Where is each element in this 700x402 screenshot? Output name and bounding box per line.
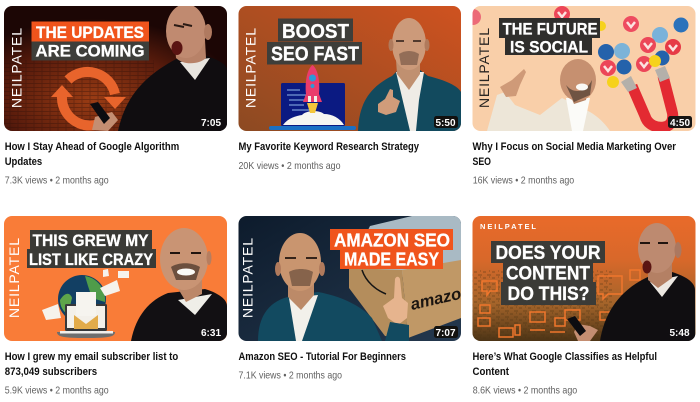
brand: neilpatel: NEILPATEL: [480, 222, 536, 231]
thumbnail: amazon seo made easy: [238, 216, 473, 341]
heading: list like crazy: LIST LIKE CRAZY: [29, 250, 154, 269]
video card 5: [238, 216, 473, 382]
orange label: made easy: [340, 250, 443, 269]
icons: speech bubbles: [478, 270, 640, 337]
brand: neilpatel: NEILPATEL: [240, 238, 256, 318]
person: [258, 233, 409, 341]
thumbnail: the future is social: 4:50: [670, 118, 690, 129]
grey label: does your: [491, 241, 605, 263]
grey label: boost: [278, 18, 353, 42]
heading: amazon seo: AMAZON SEO: [334, 230, 450, 250]
video card 4: [4, 216, 227, 396]
orange label: the updates: [32, 22, 149, 42]
duration: [668, 116, 692, 128]
thumbnail: does your content do this: [472, 216, 696, 341]
heading: the updates: THE UPDATES: [36, 23, 144, 42]
grey label: do this: [501, 282, 596, 305]
heading: made easy: MADE EASY: [344, 250, 439, 270]
person: [358, 18, 461, 131]
heading: do this: DO THIS?: [508, 284, 590, 305]
grey label: this grew my: [30, 230, 152, 249]
grey label: list like crazy: [27, 249, 156, 268]
views: 16K views • 2 months ago: [473, 174, 574, 186]
title: My Favorite Keyword Research Strategy: [238, 141, 420, 153]
thumbnail: boost seo fast: [238, 6, 461, 131]
grey label: content: [503, 262, 593, 283]
orange label: amazon seo: [330, 229, 453, 250]
heading: is social: IS SOCIAL: [510, 38, 588, 56]
video card 1: [4, 4, 227, 186]
views: 8.6K views • 2 months ago: [473, 384, 577, 396]
heading: seo fast: SEO FAST: [271, 44, 359, 66]
duration: 6:31: [201, 328, 221, 339]
heading: this grew my: THIS GREW MY: [32, 231, 149, 250]
person: [131, 228, 227, 341]
icons: social reaction badges: [465, 6, 688, 88]
views: 7.3K views • 2 months ago: [5, 174, 109, 186]
thumbnail: amazon seo made easy: 7:07: [435, 328, 456, 339]
thumbnail: the future is social: [465, 6, 696, 131]
title: SEO: [472, 156, 491, 168]
grey label: seo fast: [267, 42, 362, 64]
duration: 7:05: [201, 118, 221, 129]
title: Here’s What Google Classifies as Helpful: [472, 351, 657, 363]
person: [487, 59, 610, 131]
icon: globe with email laptop: [42, 269, 129, 338]
brand: neilpatel: NEILPATEL: [8, 28, 24, 108]
thumbnail: the updates are coming: [4, 4, 227, 131]
heading: boost: BOOST: [282, 21, 349, 43]
brand: neilpatel: NEILPATEL: [242, 28, 258, 108]
heading: content: CONTENT: [506, 264, 590, 284]
title: Updates: [5, 156, 42, 168]
video card 2: [238, 6, 461, 172]
heading: are coming: ARE COMING: [36, 42, 144, 60]
video card 3: [465, 6, 696, 186]
icon: red magnet: [621, 66, 673, 127]
thumbnail: this grew my list like crazy: [4, 216, 227, 341]
title: Why I Focus on Social Media Marketing Over: [472, 141, 677, 153]
icon: orange refresh arrows: [51, 72, 126, 126]
person: [90, 4, 227, 131]
title: How I grew my email subscriber list to: [5, 351, 178, 363]
thumbnail: boost seo fast: 5:50: [435, 118, 456, 129]
heading: does your: DOES YOUR: [496, 243, 601, 264]
icon: amazon box: amazon: [409, 283, 473, 314]
heading: the future: THE FUTURE: [502, 20, 598, 38]
views: 20K views • 2 months ago: [238, 160, 341, 172]
title: 873,049 subscribers: [5, 366, 97, 378]
title: Amazon SEO - Tutorial For Beginners: [238, 351, 406, 363]
brand: neilpatel: NEILPATEL: [476, 28, 492, 108]
duration: [434, 326, 458, 338]
grey label: is social: [505, 37, 592, 55]
title: How I Stay Ahead of Google Algorithm: [5, 141, 179, 153]
duration: 5:48: [669, 328, 690, 339]
title: Content: [472, 366, 509, 378]
grey label: are coming: [32, 42, 149, 60]
grey label: the future: [499, 18, 600, 38]
brand: neilpatel: NEILPATEL: [6, 238, 22, 318]
video card 6: [472, 216, 696, 396]
person: [567, 223, 695, 341]
views: 5.9K views • 2 months ago: [5, 384, 109, 396]
views: 7.1K views • 2 months ago: [238, 370, 342, 382]
icon: laptop with rocket: [269, 65, 356, 130]
icon: amazon box: [349, 216, 473, 338]
duration: [434, 116, 458, 128]
